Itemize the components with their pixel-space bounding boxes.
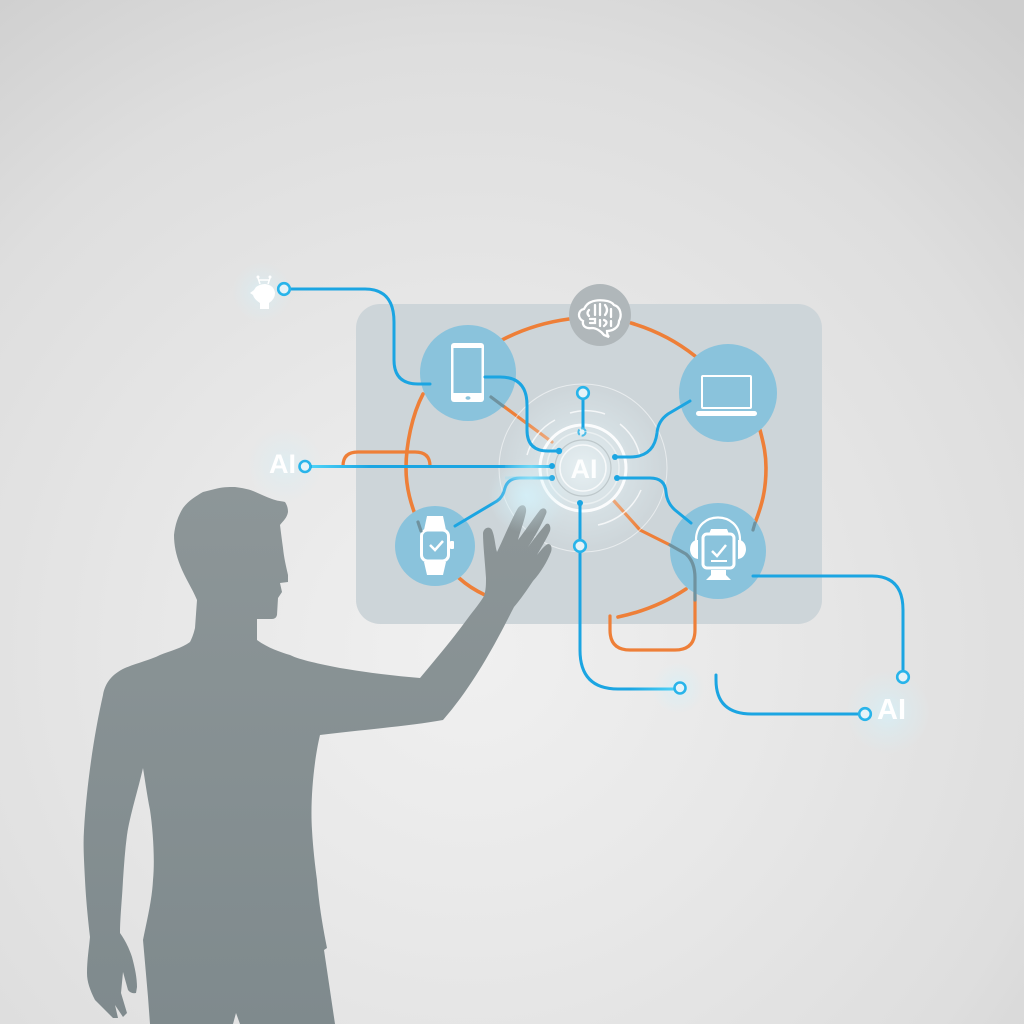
person silhouette with raised hand xyxy=(84,487,552,1024)
icon: light bulb robot xyxy=(250,276,275,309)
brain node xyxy=(569,284,631,346)
blue circuit lines xyxy=(290,289,903,714)
label: AI right: AI xyxy=(877,694,906,726)
device circle: phone xyxy=(420,325,516,421)
icon: brain xyxy=(579,300,621,337)
icon: laptop xyxy=(696,376,757,416)
highlights on blue lines xyxy=(312,466,675,689)
orange connectors xyxy=(343,397,695,650)
device circle: headset robot xyxy=(670,503,766,599)
label: AI left: AI xyxy=(269,449,296,479)
device circle: laptop xyxy=(679,344,777,442)
icon: smartphone xyxy=(451,343,484,402)
orange ring connecting the devices xyxy=(406,319,766,617)
open ring nodes xyxy=(278,283,909,720)
device circle: smartwatch xyxy=(395,506,475,586)
icon: smartwatch xyxy=(422,516,454,575)
orange lines seen through device circles xyxy=(418,397,755,600)
panel: translucent screen xyxy=(356,304,822,624)
central AI hub xyxy=(490,384,667,552)
touch glow on fingertips xyxy=(488,457,564,533)
label: AI: AI xyxy=(570,454,598,484)
icon: headset robot xyxy=(690,518,746,580)
connector dots at hub xyxy=(549,428,620,506)
glows behind nodes xyxy=(232,262,930,754)
